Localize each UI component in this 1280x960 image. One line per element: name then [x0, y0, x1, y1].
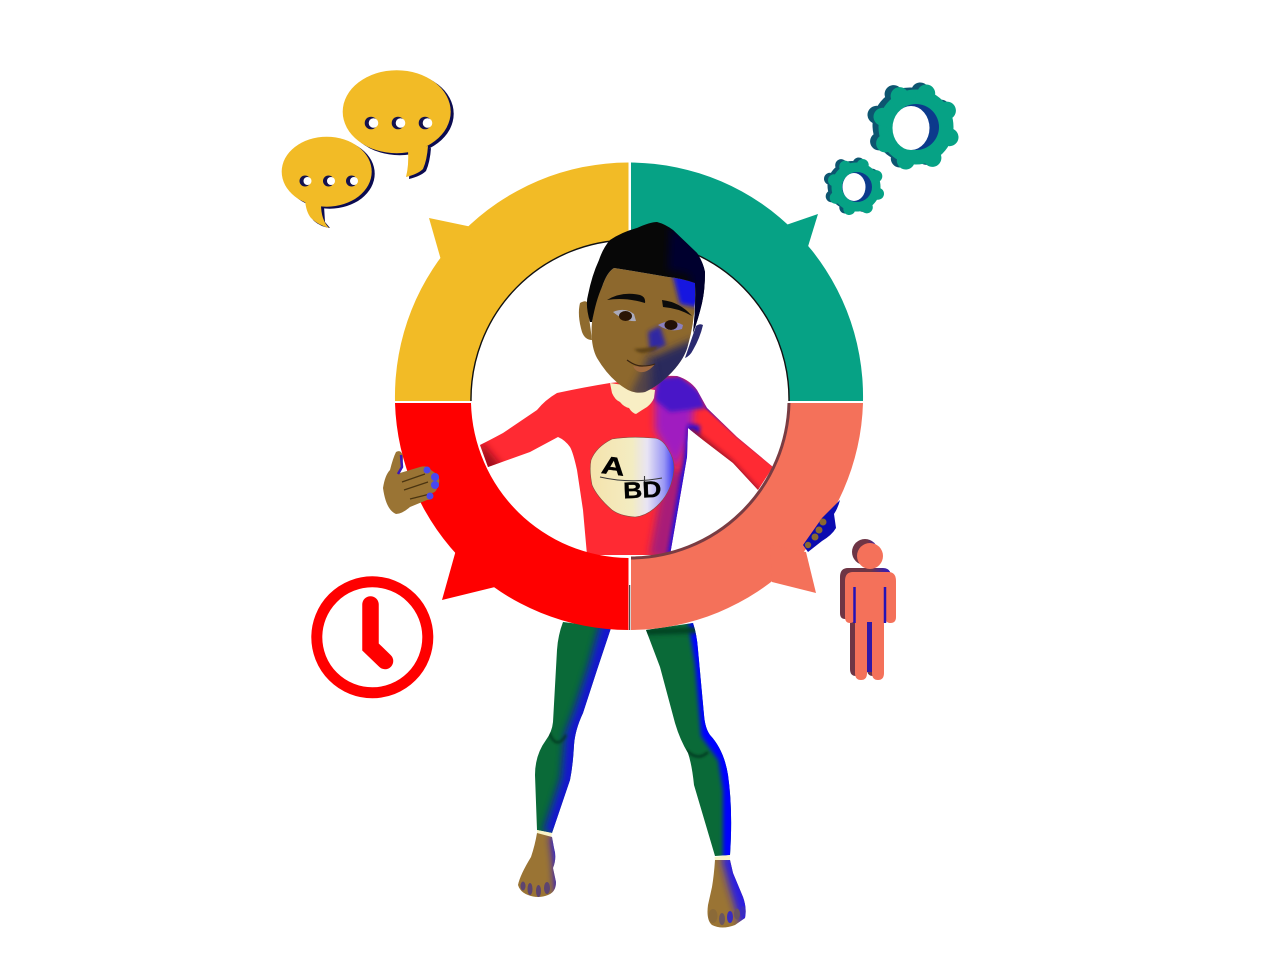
icon: gears: [828, 88, 953, 211]
right leg: [640, 620, 732, 860]
small bubble dots: [300, 176, 358, 186]
ring segment: yellow: [395, 162, 628, 401]
small speech bubble: [282, 137, 372, 228]
right foot: [708, 860, 746, 928]
logo letters BD: BD: [623, 477, 662, 504]
shirt collar: [610, 383, 655, 414]
person extrusion: [840, 539, 891, 676]
right eye: [658, 320, 683, 330]
mouth: [627, 360, 655, 372]
small gear: [828, 162, 880, 211]
large bubble shadow: [346, 72, 454, 179]
person front: [845, 543, 896, 680]
icon: speech bubbles: [282, 70, 454, 228]
right ear: [685, 324, 703, 358]
large speech bubble: [343, 70, 451, 177]
chest badge with A/BD logo: [590, 437, 674, 517]
small bubble shadow: [285, 139, 375, 228]
character head: [579, 222, 712, 402]
large bubble dots: [365, 117, 432, 129]
left foot: [518, 833, 556, 897]
shirt: [480, 376, 778, 558]
left eyebrow: [607, 294, 645, 303]
right eyebrow: [662, 300, 692, 316]
icon: person: [840, 539, 896, 680]
left ear: [579, 301, 592, 340]
logo fraction line: [600, 476, 662, 483]
character body: legs, torso and arms behind the ring: [480, 376, 778, 927]
icon: clock: [317, 582, 428, 693]
ring segment: red: [395, 403, 628, 630]
ring segment: teal: [631, 162, 863, 401]
large gear: [873, 88, 953, 164]
left hand: [383, 451, 439, 514]
logo letter A: A: [600, 452, 626, 482]
infographic illustration: [282, 70, 958, 928]
person gap between legs: [867, 620, 873, 672]
right hand: [803, 500, 840, 552]
left ankle cuff: [537, 830, 552, 838]
cycle ring: [395, 162, 863, 630]
face: [592, 268, 695, 393]
ring segment: salmon: [631, 403, 863, 630]
hair: [587, 222, 712, 335]
left leg: [535, 620, 613, 835]
left eye: [613, 310, 636, 321]
right ankle cuff: [714, 855, 730, 861]
nose: [634, 346, 658, 353]
